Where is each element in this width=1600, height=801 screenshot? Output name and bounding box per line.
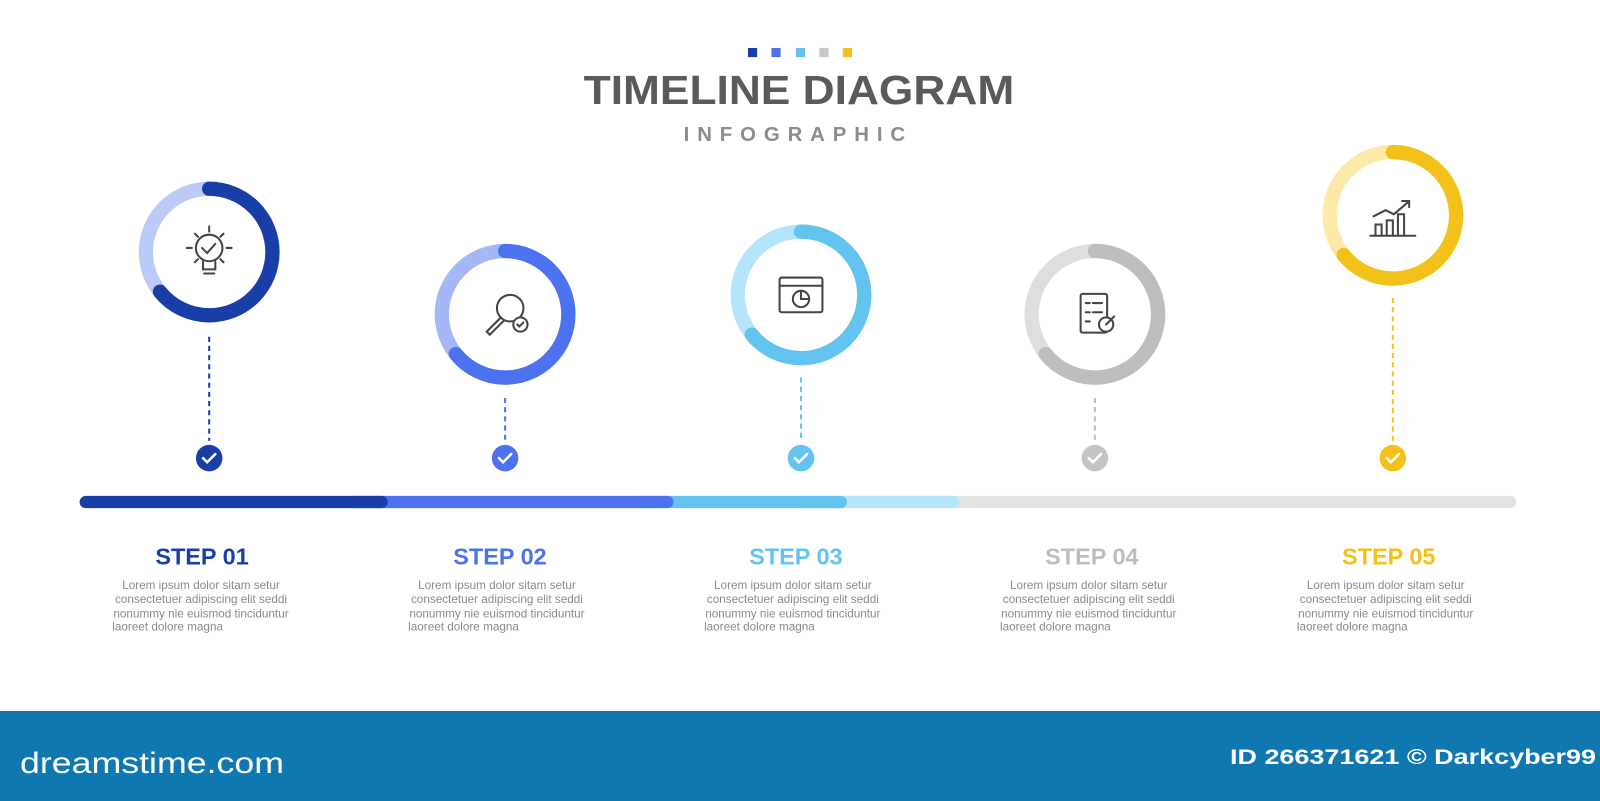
check 4 <box>1082 445 1108 471</box>
check 1 <box>196 445 222 471</box>
icon: lightbulb <box>187 227 232 273</box>
title: TIMELINE DIAGRAM <box>584 67 1014 113</box>
label: step 01: Lorem ipsum dolor sitam setur <box>122 579 280 592</box>
ring 4 <box>1032 251 1158 378</box>
step 4 <box>1032 251 1158 471</box>
icon: checklist target <box>1081 294 1114 333</box>
step 1 <box>146 189 272 471</box>
step 2 <box>442 251 568 471</box>
label: step 01: consectetuer adipiscing elit seddi <box>115 593 287 606</box>
check 5 <box>1380 445 1406 471</box>
step 5 <box>1330 152 1456 471</box>
label: step 05: consectetuer adipiscing elit seddi <box>1300 593 1472 606</box>
subtitle: INFOGRAPHIC <box>684 124 910 146</box>
label: step 04 <box>1000 543 1176 634</box>
ring 1 <box>146 189 272 315</box>
color squares <box>748 48 852 57</box>
label: step 01: laoreet dolore magna <box>112 621 223 634</box>
ring 3 <box>738 232 864 358</box>
label: step 05: nonummy nie euismod tinciduntur <box>1298 607 1473 620</box>
label: step 04: STEP 04 <box>1045 543 1139 569</box>
icon: browser chart <box>780 278 822 312</box>
label: step 03: nonummy nie euismod tinciduntur <box>705 607 881 620</box>
label: step 05: laoreet dolore magna <box>1297 621 1408 634</box>
label: step 02: nonummy nie euismod tinciduntur <box>409 607 585 620</box>
label: step 04: Lorem ipsum dolor sitam setur <box>1010 579 1168 592</box>
label: step 02 <box>408 543 585 634</box>
ring 2 <box>442 251 568 378</box>
label: step 03: STEP 03 <box>749 543 843 569</box>
step 3 <box>738 232 864 471</box>
label: step 05: Lorem ipsum dolor sitam setur <box>1307 579 1465 592</box>
label: step 04: laoreet dolore magna <box>1000 621 1111 634</box>
label: step 03: Lorem ipsum dolor sitam setur <box>714 579 872 592</box>
label: step 03 <box>704 543 881 634</box>
label: step 02: Lorem ipsum dolor sitam setur <box>418 579 576 592</box>
label: step 02: STEP 02 <box>453 543 547 569</box>
check 2 <box>492 445 518 471</box>
main content <box>80 48 1516 634</box>
label: step 02: consectetuer adipiscing elit seddi <box>411 593 583 606</box>
footer bar: dreamstime.com <box>20 747 284 780</box>
label: step 01: STEP 01 <box>155 543 249 569</box>
label: step 03: laoreet dolore magna <box>704 621 815 634</box>
label: step 02: laoreet dolore magna <box>408 621 519 634</box>
icon: growth chart <box>1370 201 1415 236</box>
timeline bar <box>80 496 1516 508</box>
label: step 04: consectetuer adipiscing elit seddi <box>1003 593 1175 606</box>
label: step 03: consectetuer adipiscing elit seddi <box>707 593 879 606</box>
ring 5 <box>1330 152 1456 279</box>
label: step 04: nonummy nie euismod tinciduntur <box>1001 607 1176 620</box>
icon: magnifier <box>487 295 528 335</box>
label: step 01 <box>112 543 289 634</box>
label: step 05: STEP 05 <box>1342 543 1435 569</box>
footer bar: ID 266371621 © Darkcyber99 <box>1230 746 1596 769</box>
label: step 05 <box>1297 543 1473 634</box>
check 3 <box>788 445 814 471</box>
footer bar <box>0 711 1600 801</box>
label: step 01: nonummy nie euismod tinciduntur <box>113 607 289 620</box>
